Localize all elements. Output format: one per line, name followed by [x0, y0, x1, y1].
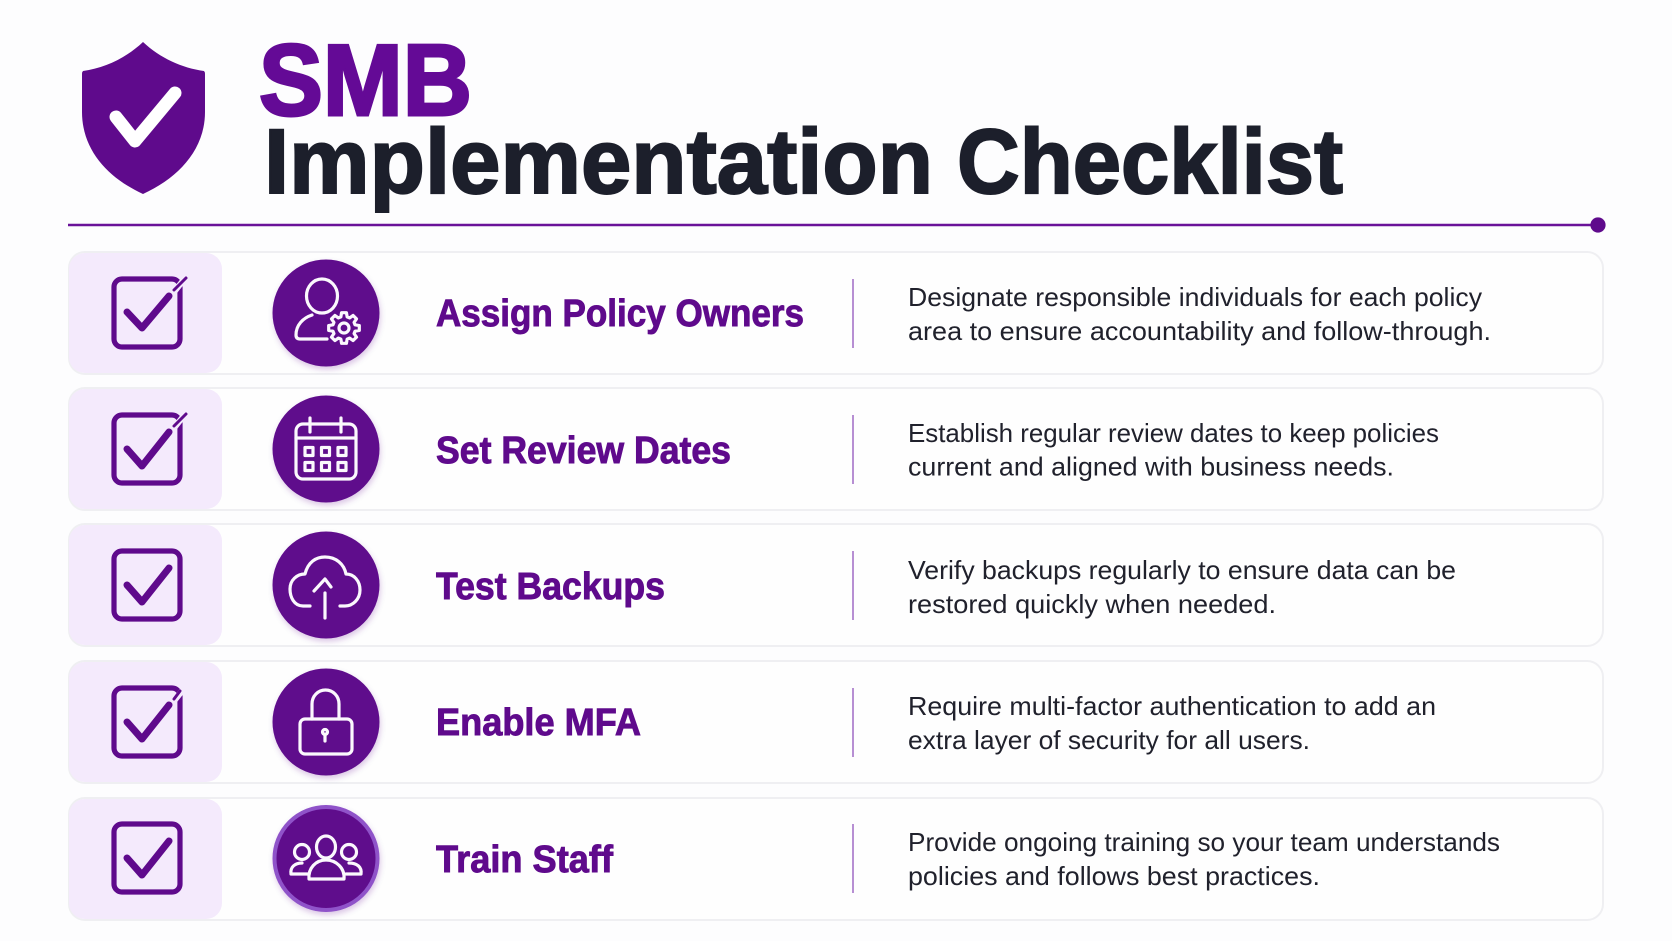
title: Checklist: [957, 111, 1343, 213]
row: Set Review Dates: [69, 388, 1603, 510]
description: current and aligned with business needs.: [908, 452, 1394, 482]
title: Implementation: [264, 111, 933, 213]
icon: calendar: [272, 396, 380, 502]
row: Enable MFA: [69, 661, 1603, 783]
description: [908, 827, 1500, 891]
divider: [852, 551, 854, 620]
description: [908, 418, 1439, 482]
divider: [852, 688, 854, 757]
row: Test Backups: [69, 524, 1603, 646]
description: Designate responsible individuals for each policy: [908, 282, 1482, 312]
item title: Set Review Dates: [436, 430, 731, 472]
icon: cloud upload: [272, 532, 380, 638]
title: [259, 25, 1343, 213]
item title: Test Backups: [436, 566, 665, 608]
description: extra layer of security for all users.: [908, 725, 1310, 755]
row: Assign Policy Owners: [69, 252, 1603, 374]
icon: shield with check: [82, 42, 205, 194]
title: SMB: [259, 25, 472, 137]
description: policies and follows best practices.: [908, 861, 1320, 891]
description: Verify backups regularly to ensure data can be: [908, 555, 1456, 585]
description: [908, 282, 1491, 346]
icon: checkbox: [114, 408, 190, 483]
item title: Assign Policy Owners: [436, 293, 804, 335]
divider: [852, 824, 854, 893]
description: area to ensure accountability and follow-through.: [908, 316, 1491, 346]
icon: checkbox: [114, 272, 190, 347]
description: restored quickly when needed.: [908, 589, 1276, 619]
description: [908, 555, 1456, 619]
divider: [852, 279, 854, 348]
item title: Train Staff: [436, 839, 613, 881]
description: Provide ongoing training so your team understands: [908, 827, 1500, 857]
item title: Enable MFA: [436, 702, 641, 744]
description: Require multi-factor authentication to add an: [908, 691, 1436, 721]
description: Establish regular review dates to keep policies: [908, 418, 1439, 448]
icon: checkbox: [114, 681, 190, 756]
header rule with end dot: [68, 217, 1606, 233]
icon: checkbox: [114, 824, 180, 892]
icon: padlock: [272, 668, 380, 776]
row: Train Staff: [69, 798, 1603, 920]
icon: user with gear: [272, 260, 380, 366]
description: [908, 691, 1436, 755]
divider: [852, 415, 854, 484]
icon: team: [274, 807, 378, 910]
icon: checkbox: [114, 551, 180, 619]
